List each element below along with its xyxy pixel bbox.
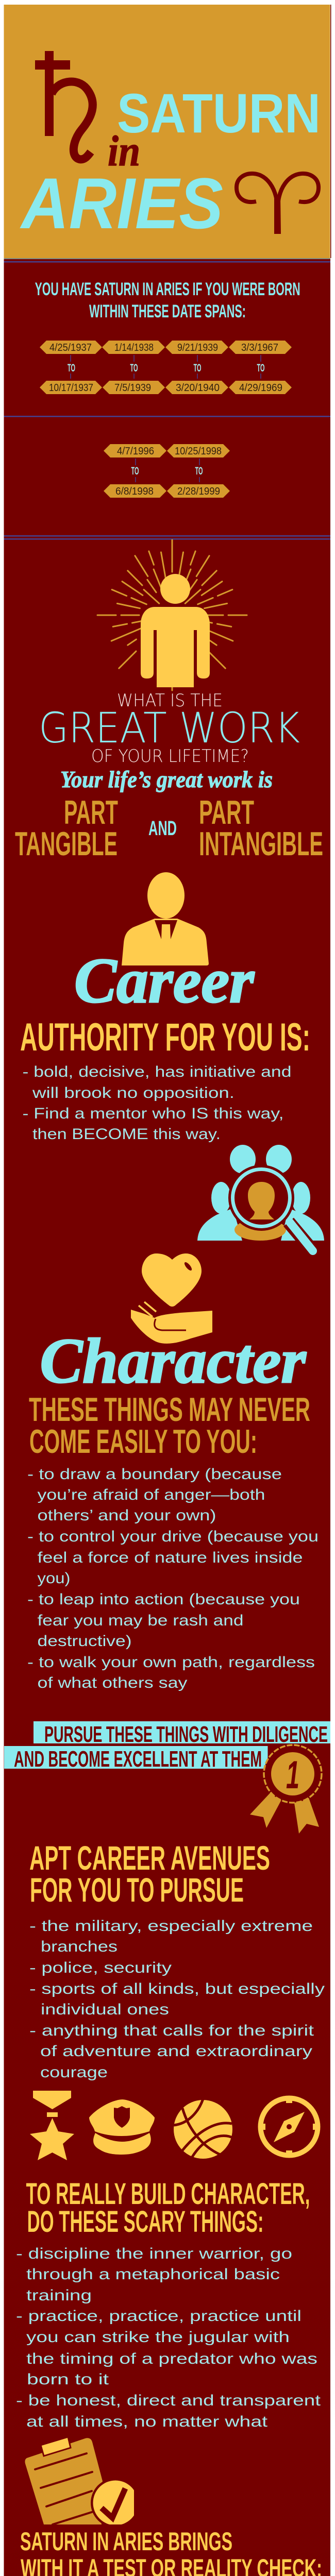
text: character list [27, 1466, 319, 1691]
icon: compass [261, 2098, 317, 2156]
chart: first date spans: TO [257, 362, 265, 374]
banner: pursue with diligence [4, 1721, 330, 1772]
chart: first date spans: 10/17/1937 [49, 382, 93, 394]
panel: title header [4, 5, 331, 258]
chart: first date spans: TO [68, 362, 75, 374]
text: scary things list: born to it [27, 2371, 109, 2388]
icon: heart in hand [131, 1253, 212, 1344]
heading: test or reality check [20, 2527, 322, 2576]
chart: first date spans: 3/3/1967 [241, 342, 278, 353]
text: character list: of what others say [37, 1674, 188, 1691]
text: character list: feel a force of nature lives inside [37, 1549, 303, 1566]
title: ARIES: ARIES [20, 163, 223, 244]
chart: first date spans: 9/21/1939 [177, 342, 218, 353]
text: character list: - to walk your own path, regardless [27, 1654, 315, 1671]
text: career list: - police, security [29, 1959, 172, 1976]
text: character list: - to leap into action (because you [27, 1591, 300, 1608]
text: career list: individual ones [41, 2001, 169, 2018]
heading: what is the great work: OF YOUR LIFETIME? [91, 746, 249, 767]
heading: Character: Character [40, 1326, 307, 1396]
icon: businessman [122, 872, 209, 965]
heading: Career: Career [74, 945, 255, 1016]
text: part tangible and part intangible: PART [199, 793, 254, 831]
chart: second date spans: 2/28/1999 [177, 486, 220, 497]
icon: police cap [89, 2099, 155, 2155]
text: career list: - the military, especially extreme [29, 1918, 313, 1935]
text: life's great work: Your life’s great work is [60, 766, 273, 792]
chart: second date spans: 6/8/1998 [115, 486, 154, 497]
text: character list: destructive) [37, 1633, 132, 1650]
text: character list: others’ and your own) [37, 1507, 216, 1524]
chart: first date spans: TO [194, 362, 201, 374]
icon: radiant person [97, 540, 247, 690]
chart: first date spans: 7/5/1939 [114, 382, 151, 394]
chart: second date spans: TO [195, 465, 203, 477]
heading: what is the great work [39, 690, 300, 767]
heading: these things may never [29, 1391, 310, 1460]
heading: date span intro [35, 279, 300, 321]
icon: basketball [174, 2099, 233, 2159]
chart: second date spans: 10/25/1998 [175, 446, 222, 457]
icon: number one ribbon: 1 [286, 1753, 299, 1797]
text: character list: you) [37, 1570, 70, 1587]
chart: second date spans: 4/7/1996 [117, 446, 154, 457]
chart: first date spans: 4/29/1969 [239, 382, 282, 394]
text: scary things list [16, 2245, 321, 2430]
heading: to really build character [26, 2177, 310, 2239]
chart: second date spans [104, 444, 230, 498]
text: scary things list: at all times, no matter what [26, 2413, 268, 2430]
text: authority list: will brook no opposition. [32, 1084, 234, 1101]
text: character list: fear you may be rash and [37, 1612, 243, 1629]
text: part tangible and part intangible [15, 793, 323, 862]
text: career list: of adventure and extraordinary [40, 2043, 312, 2060]
chart: first date spans: 3/20/1940 [176, 382, 220, 394]
chart: second date spans: TO [131, 465, 139, 477]
text: scary things list: - discipline the inner warrior, go [16, 2245, 292, 2262]
text: scary things list: through a metaphorical basic [26, 2266, 280, 2283]
heading: what is the great work: GREAT WORK [39, 704, 300, 753]
text: career list: courage [40, 2064, 108, 2081]
text: authority list: then BECOME this way. [32, 1126, 221, 1143]
text: career list: branches [41, 1938, 118, 1955]
text: part tangible and part intangible: PART [64, 793, 118, 831]
text: scary things list: the timing of a predator who was [26, 2350, 317, 2367]
chart: first date spans: 1/14/1938 [114, 342, 154, 353]
chart: first date spans: 4/25/1937 [49, 342, 92, 353]
text: career list: - anything that calls for the spirit [29, 2022, 314, 2039]
chart: first date spans [40, 341, 292, 394]
heading: what is the great work: WHAT IS THE [117, 690, 223, 711]
text: character list: you’re afraid of anger—both [37, 1486, 265, 1503]
text: part tangible and part intangible: AND [148, 817, 177, 840]
icon: Saturn glyph [35, 51, 93, 159]
text: authority list: - bold, decisive, has initiative and [23, 1063, 292, 1080]
icon: number one ribbon [250, 1745, 322, 1834]
title: in: in [108, 127, 140, 175]
text: authority list [23, 1063, 292, 1143]
text: scary things list: - practice, practice, practice until [16, 2308, 301, 2325]
text: authority list: - Find a mentor who IS this way, [23, 1105, 283, 1122]
text: character list: - to control your drive (because you [27, 1528, 319, 1545]
text: part tangible and part intangible: TANGIBLE [15, 825, 118, 862]
text: career list: - sports of all kinds, but especially [29, 1980, 325, 1997]
text: scary things list: - be honest, direct and transparent [16, 2392, 321, 2409]
text: character list: - to draw a boundary (because [27, 1466, 282, 1483]
heading: apt career avenues [29, 1839, 270, 1909]
icon: Aries glyph [237, 174, 319, 234]
icon: clipboard with check [25, 2437, 140, 2528]
icon: military medal [30, 2091, 74, 2160]
text: career list [29, 1918, 325, 2081]
chart: first date spans: TO [130, 362, 138, 374]
text: scary things list: you can strike the jugular with [26, 2329, 290, 2346]
text: scary things list: training [26, 2287, 92, 2304]
icon: people under magnifying glass [197, 1145, 324, 1251]
